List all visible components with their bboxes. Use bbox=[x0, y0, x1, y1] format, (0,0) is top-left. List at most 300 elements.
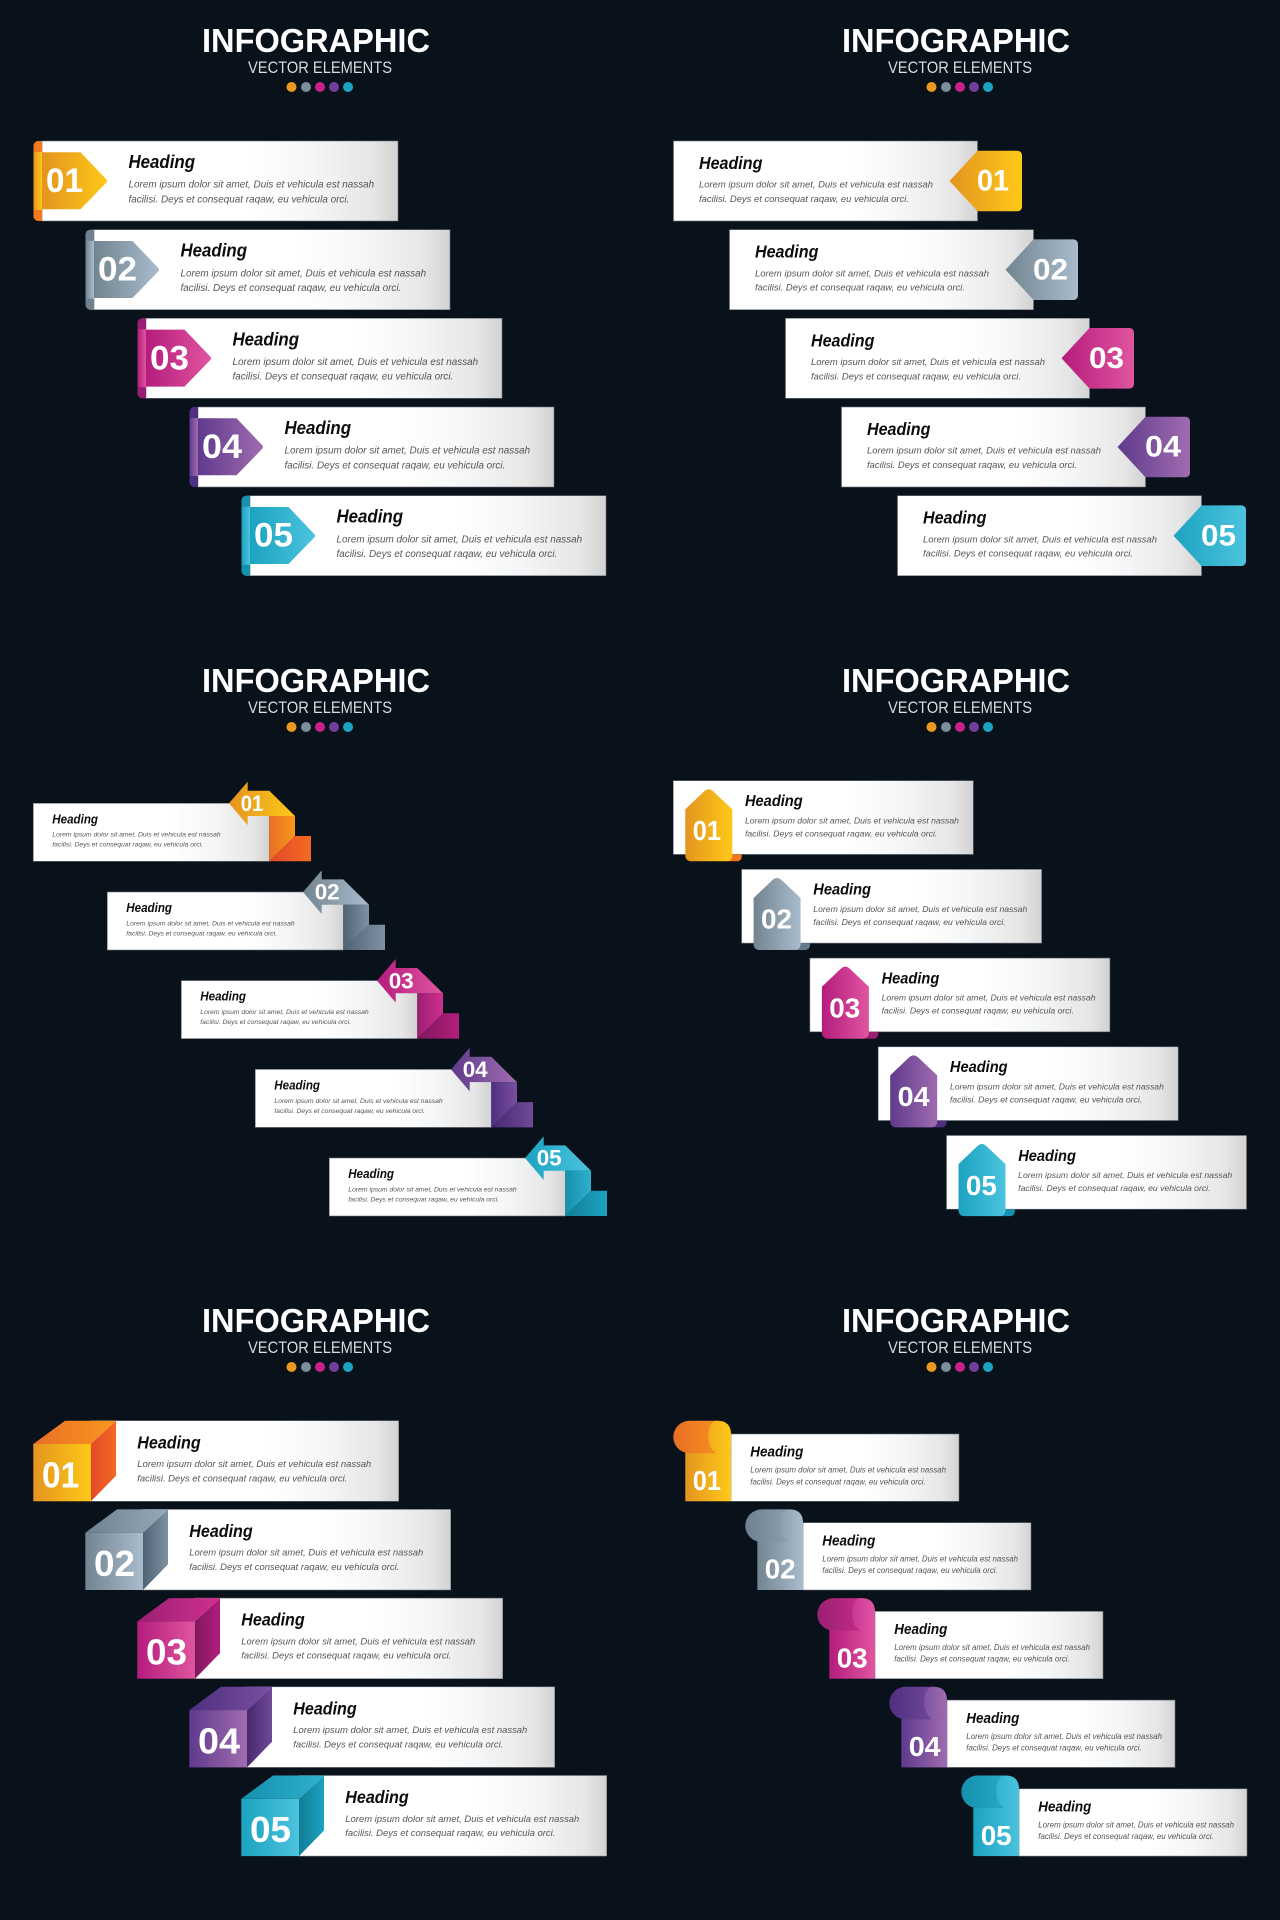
body text: facilisi. Deys et consequat raqaw, eu vehicula orci. bbox=[336, 549, 557, 560]
heading: Heading bbox=[345, 1787, 409, 1807]
icon: curl bbox=[1002, 1209, 1015, 1216]
body text bbox=[867, 446, 1101, 470]
body text: Lorem ipsum dolor sit amet, Duis et vehicula est nassah bbox=[745, 815, 959, 825]
icon: arrow bbox=[229, 782, 295, 825]
row 05 bbox=[946, 1136, 1246, 1216]
body text: Lorem ipsum dolor sit amet, Duis et vehicula est nassah bbox=[189, 1548, 423, 1558]
body text bbox=[232, 357, 478, 383]
icon: tag bbox=[1174, 505, 1246, 566]
body text: facilisi. Deys et consequat raqaw, eu vehicula orci. bbox=[750, 1477, 926, 1486]
icon: scroll curl bbox=[780, 1509, 803, 1542]
icon: house tag bbox=[958, 1144, 1006, 1216]
row 02 bbox=[107, 870, 385, 950]
body text: facilisi. Deys et consequat raqaw, eu vehicula orci. bbox=[52, 842, 203, 849]
colour dots bbox=[286, 1362, 353, 1372]
number: 04 bbox=[198, 1720, 240, 1761]
icon: arrow tag bbox=[250, 507, 315, 564]
body text: facilisi. Deys et consequat raqaw, eu vehicula orci. bbox=[1018, 1183, 1210, 1193]
body text: Lorem ipsum dolor sit amet, Duis et vehicula est nassah bbox=[894, 1643, 1090, 1652]
heading: Heading bbox=[699, 153, 763, 173]
card bbox=[247, 1687, 555, 1767]
subtitle: VECTOR ELEMENTS bbox=[888, 1339, 1032, 1357]
card bbox=[198, 407, 554, 487]
icon: fold upper bbox=[491, 1082, 517, 1127]
icon: fold upper bbox=[417, 993, 443, 1039]
body text: facilisi. Deys et consequat raqaw, eu vehicula orci. bbox=[348, 1196, 499, 1203]
body text: facilisi. Deys et consequat raqaw, eu vehicula orci. bbox=[867, 460, 1077, 470]
card bbox=[898, 496, 1202, 576]
row 05 bbox=[242, 496, 606, 576]
card bbox=[674, 141, 978, 221]
title: INFOGRAPHIC bbox=[842, 22, 1070, 59]
body text: Lorem ipsum dolor sit amet, Duis et vehicula est nassah bbox=[822, 1554, 1018, 1563]
heading: Heading bbox=[284, 418, 351, 438]
icon: cube bbox=[241, 1776, 324, 1856]
heading: Heading bbox=[923, 508, 987, 528]
card bbox=[143, 1509, 451, 1590]
heading: Heading bbox=[274, 1077, 320, 1092]
number: 01 bbox=[693, 815, 721, 846]
number: 01 bbox=[46, 162, 83, 200]
header bbox=[202, 662, 430, 732]
body text: facilisi. Deys et consequat raqaw, eu vehicula orci. bbox=[1038, 1832, 1214, 1841]
body text: facilisi. Deys et consequat raqaw, eu vehicula orci. bbox=[293, 1739, 503, 1749]
colour dots bbox=[926, 1362, 993, 1372]
body text bbox=[348, 1186, 517, 1203]
body text bbox=[894, 1643, 1090, 1664]
body text: facilisi. Deys et consequat raqaw, eu vehicula orci. bbox=[745, 828, 937, 838]
panel: scrolls bbox=[673, 1302, 1247, 1856]
icon: scroll body bbox=[829, 1630, 875, 1679]
number: 05 bbox=[254, 517, 293, 555]
body text: Lorem ipsum dolor sit amet, Duis et vehicula est nassah bbox=[232, 357, 478, 368]
card bbox=[878, 1047, 1178, 1120]
subtitle: VECTOR ELEMENTS bbox=[248, 59, 392, 77]
row 02 bbox=[85, 1509, 451, 1590]
header bbox=[842, 1302, 1070, 1372]
heading: Heading bbox=[811, 330, 875, 350]
body text: Lorem ipsum dolor sit amet, Duis et vehicula est nassah bbox=[1038, 1820, 1234, 1830]
icon: cube bbox=[189, 1687, 272, 1767]
title: INFOGRAPHIC bbox=[842, 1302, 1070, 1339]
body text bbox=[128, 180, 374, 205]
colour dots bbox=[286, 722, 353, 732]
body text: facilisi. Deys et consequat raqaw, eu vehicula orci. bbox=[755, 283, 965, 293]
number: 04 bbox=[1145, 431, 1181, 464]
row 02 bbox=[730, 230, 1078, 310]
body text bbox=[180, 268, 426, 294]
number: 05 bbox=[966, 1170, 997, 1201]
body text: Lorem ipsum dolor sit amet, Duis et vehicula est nassah bbox=[274, 1098, 443, 1105]
panel: 3D cubes bbox=[33, 1302, 607, 1856]
heading: Heading bbox=[52, 811, 98, 826]
number: 03 bbox=[389, 968, 414, 993]
icon: tag bbox=[1006, 239, 1078, 300]
body text: Lorem ipsum dolor sit amet, Duis et vehicula est nassah bbox=[128, 180, 374, 191]
icon: tag bbox=[1062, 328, 1134, 389]
icon: fold lower bbox=[343, 925, 385, 950]
row 03 bbox=[137, 1598, 503, 1679]
number: 05 bbox=[1201, 519, 1236, 552]
body text: facilisi. Deys et consequat raqaw, eu vehicula orci. bbox=[128, 194, 349, 205]
body text: facilisi. Deys et consequat raqaw, eu vehicula orci. bbox=[882, 1006, 1074, 1016]
icon: fold upper bbox=[565, 1171, 591, 1216]
card bbox=[181, 981, 417, 1039]
icon: curl bbox=[728, 854, 742, 861]
card bbox=[94, 230, 450, 310]
number: 03 bbox=[829, 992, 860, 1023]
icon: arrow bbox=[377, 959, 443, 1003]
body text: facilisi. Deys et consequat raqaw, eu vehicula orci. bbox=[813, 917, 1006, 927]
body text: facilisi. Deys et consequat raqaw, eu vehicula orci. bbox=[699, 194, 909, 204]
body text: facilisi. Deys et consequat raqaw, eu vehicula orci. bbox=[923, 549, 1133, 559]
heading: Heading bbox=[293, 1698, 357, 1718]
row 03 bbox=[181, 959, 459, 1039]
heading: Heading bbox=[200, 989, 246, 1004]
body text: Lorem ipsum dolor sit amet, Duis et vehicula est nassah bbox=[750, 1466, 946, 1475]
row 04 bbox=[878, 1047, 1178, 1127]
colour dots bbox=[286, 82, 353, 92]
icon: strip bbox=[242, 496, 250, 576]
number: 02 bbox=[98, 251, 137, 289]
header bbox=[842, 662, 1070, 732]
row 05 bbox=[961, 1776, 1247, 1856]
body text: facilisi. Deys et consequat raqaw, eu vehicula orci. bbox=[345, 1828, 555, 1838]
body text bbox=[755, 268, 989, 293]
body text: facilisi. Deys et consequat raqaw, eu vehicula orci. bbox=[274, 1108, 425, 1115]
row 01 bbox=[34, 141, 398, 221]
body text: Lorem ipsum dolor sit amet, Duis et vehicula est nassah bbox=[137, 1459, 371, 1469]
row 02 bbox=[86, 230, 450, 310]
body text bbox=[137, 1459, 371, 1483]
body text: Lorem ipsum dolor sit amet, Duis et vehicula est nassah bbox=[882, 993, 1096, 1003]
card bbox=[329, 1158, 565, 1216]
icon: scroll curl bbox=[708, 1421, 731, 1453]
icon: scroll body bbox=[685, 1453, 731, 1501]
icon: scroll roll bbox=[745, 1509, 803, 1542]
number: 02 bbox=[315, 880, 340, 905]
heading: Heading bbox=[189, 1521, 253, 1541]
title: INFOGRAPHIC bbox=[202, 662, 430, 699]
card bbox=[947, 1700, 1175, 1767]
card bbox=[842, 407, 1146, 487]
heading: Heading bbox=[822, 1533, 875, 1549]
icon: strip bbox=[138, 318, 146, 398]
card bbox=[299, 1776, 607, 1856]
body text: Lorem ipsum dolor sit amet, Duis et vehicula est nassah bbox=[966, 1732, 1162, 1741]
panel: house tags bbox=[673, 662, 1246, 1216]
body text bbox=[241, 1636, 475, 1661]
row 05 bbox=[241, 1776, 607, 1856]
subtitle: VECTOR ELEMENTS bbox=[248, 1339, 392, 1357]
body text bbox=[284, 446, 530, 471]
heading: Heading bbox=[137, 1432, 201, 1452]
card bbox=[195, 1598, 503, 1679]
body text bbox=[811, 357, 1045, 381]
icon: house tag bbox=[822, 967, 869, 1039]
row 01 bbox=[33, 782, 311, 861]
heading: Heading bbox=[894, 1622, 947, 1638]
icon: scroll curl bbox=[924, 1687, 947, 1719]
row 04 bbox=[190, 407, 554, 487]
icon: arrow tag bbox=[94, 241, 159, 298]
icon: strip bbox=[34, 141, 42, 221]
body text: Lorem ipsum dolor sit amet, Duis et vehicula est nassah bbox=[293, 1725, 527, 1735]
body text: Lorem ipsum dolor sit amet, Duis et vehicula est nassah bbox=[699, 180, 933, 190]
icon: tag bbox=[1118, 417, 1190, 477]
panel: folded arrows bbox=[33, 662, 607, 1216]
title: INFOGRAPHIC bbox=[202, 22, 430, 59]
card bbox=[803, 1523, 1031, 1590]
card bbox=[1019, 1789, 1247, 1856]
subtitle: VECTOR ELEMENTS bbox=[248, 699, 392, 717]
body text: facilisi. Deys et consequat raqaw, eu vehicula orci. bbox=[241, 1651, 451, 1661]
subtitle: VECTOR ELEMENTS bbox=[888, 699, 1032, 717]
body text: Lorem ipsum dolor sit amet, Duis et vehicula est nassah bbox=[336, 534, 582, 545]
number: 05 bbox=[537, 1146, 562, 1171]
icon: fold lower bbox=[417, 1013, 459, 1039]
body text: facilisi. Deys et consequat raqaw, eu vehicula orci. bbox=[189, 1562, 399, 1572]
icon: curl bbox=[797, 943, 810, 950]
body text: facilisi. Deys et consequat raqaw, eu vehicula orci. bbox=[126, 930, 277, 937]
card bbox=[255, 1069, 491, 1127]
icon: scroll roll bbox=[889, 1687, 947, 1719]
body text bbox=[699, 180, 933, 204]
icon: house tag bbox=[754, 878, 801, 950]
body text: facilisi. Deys et consequat raqaw, eu vehicula orci. bbox=[966, 1743, 1142, 1752]
card bbox=[875, 1611, 1103, 1679]
card bbox=[730, 230, 1034, 310]
number: 01 bbox=[42, 1454, 79, 1495]
row 05 bbox=[898, 496, 1246, 576]
icon: cube bbox=[85, 1509, 168, 1590]
row 02 bbox=[742, 869, 1042, 950]
body text: Lorem ipsum dolor sit amet, Duis et vehicula est nassah bbox=[950, 1081, 1164, 1091]
icon: scroll body bbox=[757, 1541, 803, 1590]
heading: Heading bbox=[241, 1610, 305, 1630]
icon: fold upper bbox=[343, 905, 369, 950]
body text bbox=[966, 1732, 1162, 1752]
row 03 bbox=[810, 958, 1110, 1039]
body text bbox=[1018, 1170, 1232, 1193]
body text: Lorem ipsum dolor sit amet, Duis et vehicula est nassah bbox=[345, 1814, 579, 1824]
body text bbox=[882, 993, 1096, 1016]
icon: arrow tag bbox=[146, 330, 211, 387]
icon: arrow tag bbox=[42, 152, 107, 209]
panel: arrow tabs left bbox=[34, 22, 606, 576]
body text: facilisi. Deys et consequat raqaw, eu vehicula orci. bbox=[950, 1094, 1142, 1104]
body text: Lorem ipsum dolor sit amet, Duis et vehicula est nassah bbox=[755, 268, 989, 278]
row 01 bbox=[674, 141, 1022, 221]
icon: scroll curl bbox=[996, 1776, 1019, 1808]
heading: Heading bbox=[750, 1445, 803, 1461]
heading: Heading bbox=[813, 882, 871, 899]
row 03 bbox=[138, 318, 502, 398]
heading: Heading bbox=[1038, 1800, 1091, 1816]
card bbox=[250, 496, 606, 576]
number: 02 bbox=[1033, 253, 1068, 286]
body text: Lorem ipsum dolor sit amet, Duis et vehicula est nassah bbox=[284, 446, 530, 457]
body text: Lorem ipsum dolor sit amet, Duis et vehicula est nassah bbox=[126, 920, 295, 927]
header bbox=[842, 22, 1070, 92]
row 05 bbox=[329, 1136, 607, 1216]
card bbox=[91, 1421, 399, 1501]
icon: cube bbox=[33, 1421, 116, 1501]
row 03 bbox=[817, 1598, 1103, 1679]
body text bbox=[336, 534, 582, 560]
heading: Heading bbox=[180, 241, 247, 261]
header bbox=[202, 1302, 430, 1372]
row 02 bbox=[745, 1509, 1031, 1590]
heading: Heading bbox=[882, 970, 940, 987]
number: 03 bbox=[146, 1632, 187, 1673]
icon: curl bbox=[865, 1032, 878, 1039]
row 04 bbox=[889, 1687, 1175, 1767]
card bbox=[673, 781, 973, 854]
body text: facilisi. Deys et consequat raqaw, eu vehicula orci. bbox=[822, 1566, 998, 1575]
number: 05 bbox=[250, 1809, 291, 1850]
title: INFOGRAPHIC bbox=[202, 1302, 430, 1339]
icon: arrow tag bbox=[198, 418, 263, 475]
icon: arrow bbox=[451, 1048, 517, 1091]
header bbox=[202, 22, 430, 92]
heading: Heading bbox=[867, 419, 931, 439]
card bbox=[946, 1136, 1246, 1209]
icon: scroll body bbox=[901, 1719, 947, 1767]
body text: Lorem ipsum dolor sit amet, Duis et vehicula est nassah bbox=[200, 1009, 369, 1016]
body text: Lorem ipsum dolor sit amet, Duis et vehicula est nassah bbox=[1018, 1170, 1232, 1180]
subtitle: VECTOR ELEMENTS bbox=[888, 59, 1032, 77]
heading: Heading bbox=[950, 1059, 1008, 1076]
body text: facilisi. Deys et consequat raqaw, eu vehicula orci. bbox=[137, 1473, 347, 1483]
colour dots bbox=[926, 722, 993, 732]
body text bbox=[745, 815, 959, 838]
row 03 bbox=[786, 318, 1134, 398]
heading: Heading bbox=[126, 900, 172, 915]
body text: Lorem ipsum dolor sit amet, Duis et vehicula est nassah bbox=[811, 357, 1045, 367]
body text: Lorem ipsum dolor sit amet, Duis et vehicula est nassah bbox=[180, 268, 426, 279]
number: 01 bbox=[693, 1465, 721, 1496]
row 01 bbox=[673, 781, 973, 861]
body text: Lorem ipsum dolor sit amet, Duis et vehicula est nassah bbox=[348, 1186, 517, 1193]
icon: fold lower bbox=[491, 1102, 533, 1127]
card bbox=[146, 318, 502, 398]
number: 01 bbox=[977, 165, 1009, 198]
icon: cube bbox=[137, 1598, 220, 1679]
body text: facilisi. Deys et consequat raqaw, eu vehicula orci. bbox=[200, 1019, 351, 1026]
number: 03 bbox=[1089, 342, 1124, 375]
heading: Heading bbox=[755, 242, 819, 262]
body text bbox=[345, 1814, 579, 1838]
number: 02 bbox=[94, 1543, 135, 1584]
body text: Lorem ipsum dolor sit amet, Duis et vehicula est nassah bbox=[923, 534, 1157, 544]
body text: facilisi. Deys et consequat raqaw, eu vehicula orci. bbox=[811, 371, 1021, 381]
body text: Lorem ipsum dolor sit amet, Duis et vehicula est nassah bbox=[867, 446, 1101, 456]
icon: scroll roll bbox=[817, 1598, 875, 1631]
heading: Heading bbox=[966, 1711, 1019, 1727]
icon: tag bbox=[950, 151, 1022, 211]
icon: house tag bbox=[890, 1055, 937, 1127]
heading: Heading bbox=[348, 1166, 394, 1181]
icon: arrow bbox=[525, 1136, 591, 1180]
body text bbox=[293, 1725, 527, 1749]
colour dots bbox=[926, 82, 993, 92]
body text bbox=[822, 1554, 1018, 1575]
number: 03 bbox=[150, 339, 189, 377]
card bbox=[810, 958, 1110, 1032]
heading: Heading bbox=[745, 793, 803, 810]
title: INFOGRAPHIC bbox=[842, 662, 1070, 699]
icon: scroll roll bbox=[961, 1776, 1019, 1808]
icon: arrow bbox=[303, 870, 369, 914]
panel: arrow tabs right bbox=[674, 22, 1246, 576]
body text bbox=[126, 920, 295, 937]
card bbox=[786, 318, 1090, 398]
body text bbox=[950, 1081, 1164, 1104]
icon: strip bbox=[86, 230, 94, 310]
heading: Heading bbox=[232, 329, 299, 349]
card bbox=[33, 803, 269, 861]
icon: fold upper bbox=[269, 816, 295, 861]
body text: Lorem ipsum dolor sit amet, Duis et vehicula est nassah bbox=[813, 904, 1028, 914]
number: 04 bbox=[463, 1057, 488, 1082]
row 01 bbox=[673, 1421, 959, 1501]
row 04 bbox=[255, 1048, 533, 1127]
icon: curl bbox=[933, 1120, 947, 1127]
icon: fold lower bbox=[565, 1191, 607, 1216]
body text bbox=[200, 1009, 369, 1026]
icon: fold lower bbox=[269, 836, 311, 861]
body text bbox=[750, 1466, 946, 1486]
number: 04 bbox=[898, 1081, 930, 1112]
body text: facilisi. Deys et consequat raqaw, eu vehicula orci. bbox=[232, 372, 453, 383]
icon: house tag bbox=[685, 789, 732, 861]
number: 02 bbox=[761, 904, 792, 935]
number: 05 bbox=[981, 1820, 1012, 1851]
body text bbox=[1038, 1820, 1234, 1841]
card bbox=[42, 141, 398, 221]
body text: Lorem ipsum dolor sit amet, Duis et vehicula est nassah bbox=[241, 1636, 475, 1646]
heading: Heading bbox=[1018, 1148, 1076, 1165]
body text bbox=[52, 832, 221, 849]
row 04 bbox=[189, 1687, 555, 1767]
heading: Heading bbox=[336, 507, 403, 527]
body text bbox=[274, 1098, 443, 1115]
row 04 bbox=[842, 407, 1190, 487]
body text bbox=[813, 904, 1028, 927]
body text: Lorem ipsum dolor sit amet, Duis et vehicula est nassah bbox=[52, 832, 221, 839]
number: 01 bbox=[241, 791, 263, 816]
card bbox=[731, 1434, 959, 1501]
card bbox=[742, 869, 1042, 943]
row 01 bbox=[33, 1421, 399, 1501]
icon: scroll curl bbox=[852, 1598, 875, 1631]
heading: Heading bbox=[128, 152, 195, 172]
icon: strip bbox=[190, 407, 198, 487]
number: 02 bbox=[765, 1554, 796, 1585]
number: 03 bbox=[837, 1642, 868, 1673]
body text: facilisi. Deys et consequat raqaw, eu vehicula orci. bbox=[180, 283, 401, 294]
body text bbox=[923, 534, 1157, 559]
number: 04 bbox=[202, 428, 242, 466]
body text: facilisi. Deys et consequat raqaw, eu vehicula orci. bbox=[284, 460, 505, 471]
body text bbox=[189, 1548, 423, 1572]
card bbox=[107, 892, 343, 950]
icon: scroll body bbox=[973, 1808, 1019, 1856]
body text: facilisi. Deys et consequat raqaw, eu vehicula orci. bbox=[894, 1655, 1070, 1664]
number: 04 bbox=[909, 1731, 941, 1762]
icon: scroll roll bbox=[673, 1421, 731, 1453]
